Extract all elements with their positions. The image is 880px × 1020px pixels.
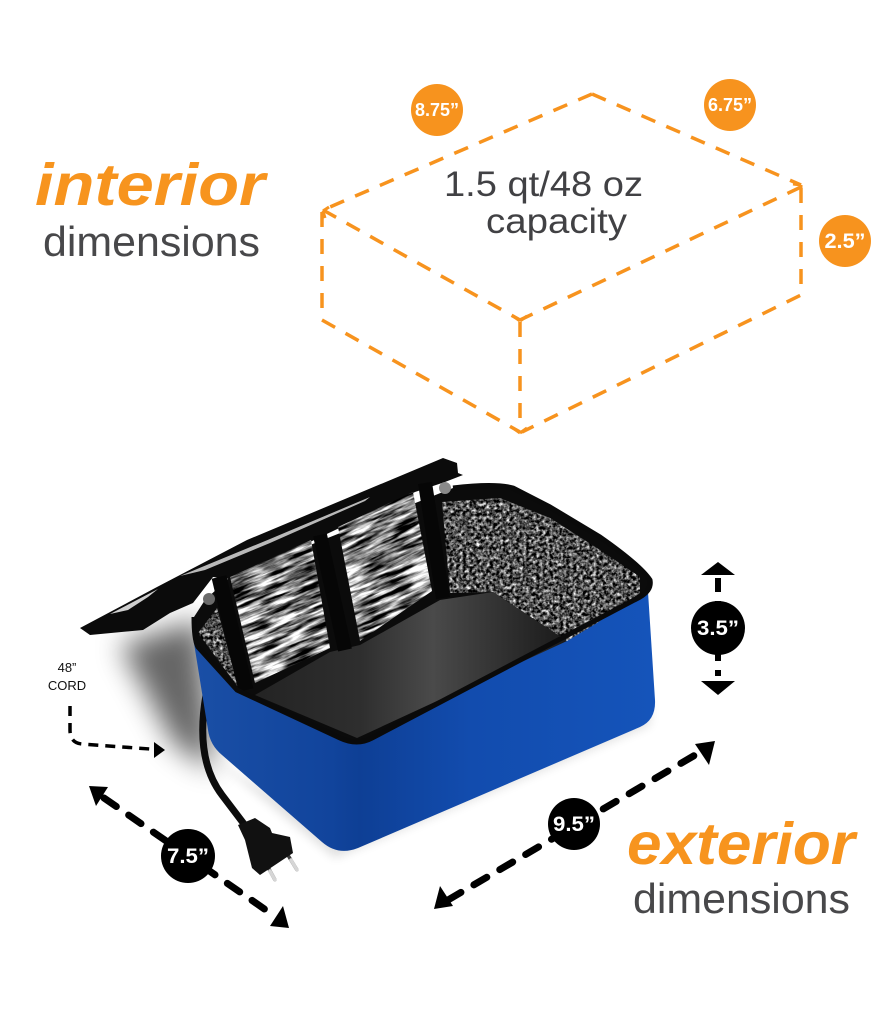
capacity label: capacity	[486, 202, 628, 241]
power cord	[203, 695, 244, 824]
inner straps	[219, 483, 443, 690]
badge: 8.75 inch: 8.75”	[415, 100, 459, 120]
zipper rim	[194, 486, 650, 742]
badge: 2.5 inch: 2.5”	[824, 230, 866, 253]
dimension arrow: 3.5 inch	[691, 562, 745, 695]
capacity label: 1.5 qt/48 oz	[444, 165, 643, 204]
callout: 48 inch cord: 48”	[58, 660, 76, 675]
badge: 6.75 inch: 6.75”	[708, 95, 752, 115]
dimension arrow: 3.5 inch: 3.5”	[697, 617, 739, 640]
bag interior base	[194, 486, 650, 742]
callout: 48 inch cord: CORD	[48, 678, 86, 693]
product: lunch bag	[80, 440, 655, 880]
callout: 48 inch cord	[48, 660, 165, 758]
heading: exterior dimensions	[627, 811, 858, 922]
interior floor	[255, 592, 567, 738]
soft shadow	[120, 620, 214, 770]
dimension arrow: 7.5 inch	[89, 786, 289, 928]
dimension arrow: 9.5 inch: 9.5”	[553, 813, 595, 836]
lid	[80, 458, 463, 635]
heading: interior dimensions: interior	[35, 152, 268, 218]
power plug	[238, 818, 297, 880]
badge: 8.75 inch	[411, 84, 463, 136]
zipper pulls	[203, 593, 215, 605]
heading: exterior dimensions: dimensions	[633, 875, 850, 922]
dimension arrow: 7.5 inch: 7.5”	[167, 845, 209, 868]
capacity label	[444, 165, 643, 241]
badge: 6.75 inch	[704, 79, 756, 131]
heading: interior dimensions: dimensions	[43, 218, 260, 265]
foil lining panels	[198, 492, 640, 686]
dimension arrow: 9.5 inch	[434, 741, 715, 909]
bag blue body	[193, 592, 655, 851]
heading: interior dimensions	[35, 152, 268, 265]
infographic canvas	[36, 79, 871, 928]
heading: exterior dimensions: exterior	[627, 811, 858, 877]
diagram: interior box dashed outline	[322, 94, 801, 433]
badge: 2.5 inch	[819, 215, 871, 267]
